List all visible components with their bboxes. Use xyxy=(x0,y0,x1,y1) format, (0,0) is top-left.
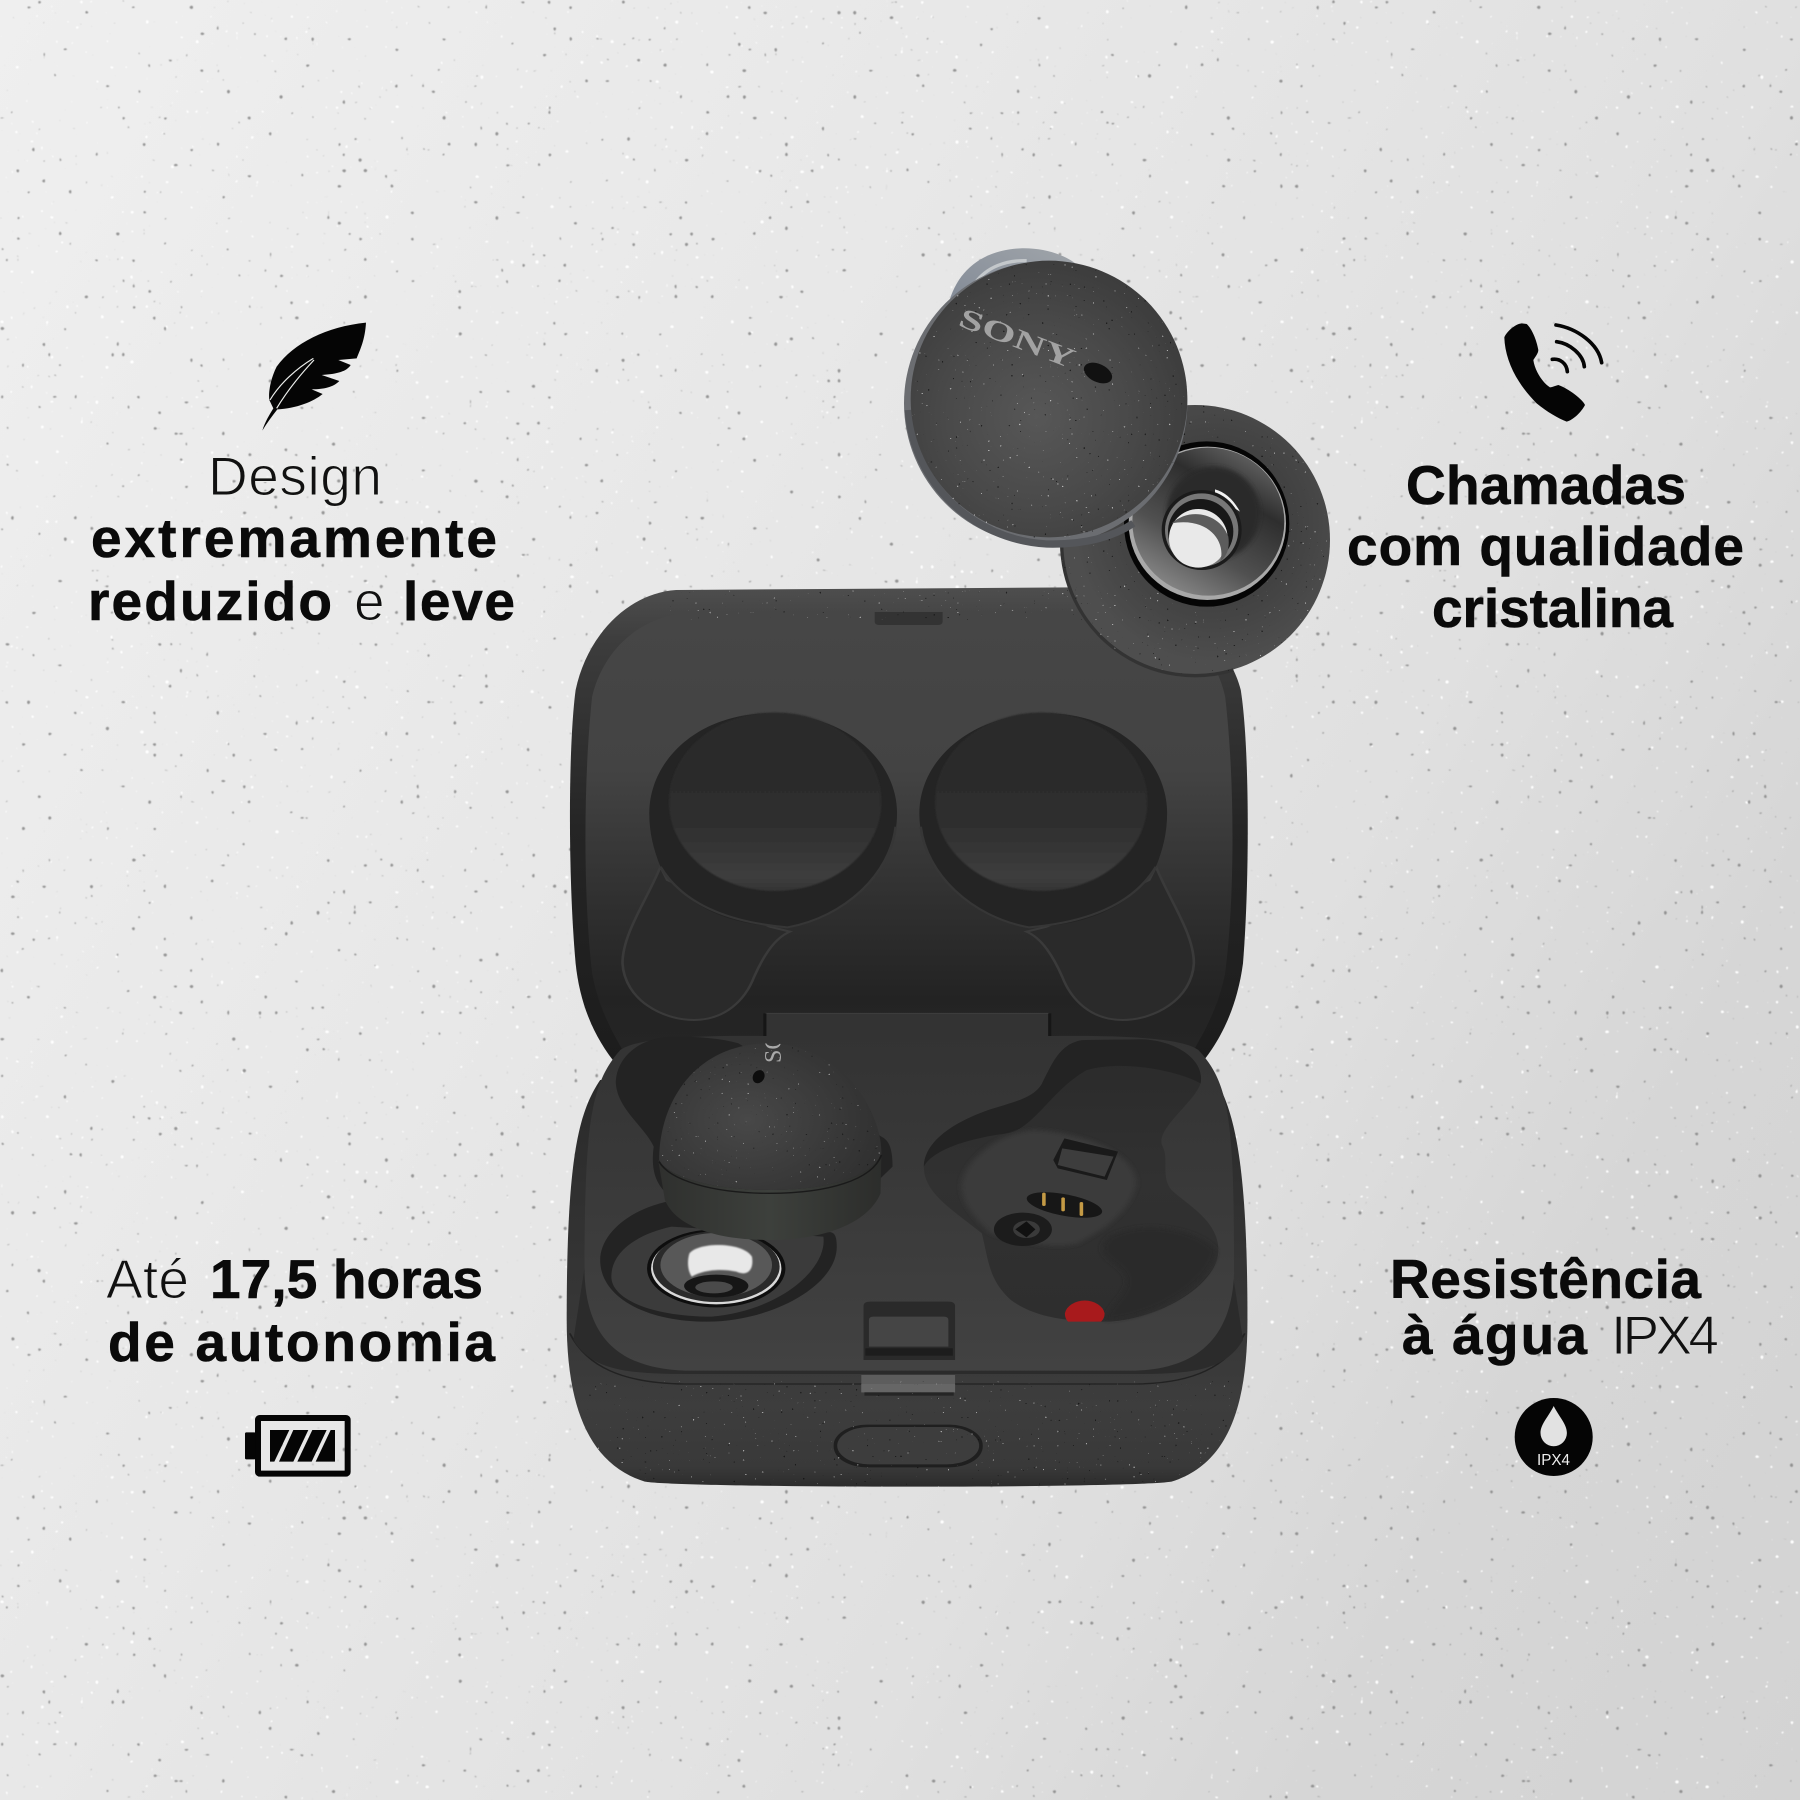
icon: phone with signal xyxy=(1504,323,1602,422)
bud speckle xyxy=(662,1046,880,1186)
lid cup left xyxy=(622,712,897,1020)
earbud in tray: slot xyxy=(751,1069,766,1084)
lid hinge xyxy=(765,1013,1050,1060)
dome speckle xyxy=(912,264,1187,538)
text: design xyxy=(88,445,515,632)
text: design: reduzido xyxy=(88,570,332,632)
metal ear loop xyxy=(1124,441,1289,607)
disc speckle xyxy=(1060,405,1330,675)
earbud in tray: SONY logo: SON xyxy=(761,1015,787,1063)
right well xyxy=(924,1039,1218,1322)
gold pins xyxy=(1023,1187,1106,1223)
icon: battery xyxy=(245,1418,348,1474)
icon: water drop badge xyxy=(1515,1398,1593,1476)
SONY logo and mic slot: SONY xyxy=(954,303,1079,375)
earbud in tray: stem disc xyxy=(611,1227,824,1317)
SONY logo and mic slot xyxy=(954,303,1115,387)
text: autonomy: Até xyxy=(106,1248,189,1310)
earbud in tray: band xyxy=(658,1153,881,1240)
text: IPX4 resistance xyxy=(1390,1248,1719,1366)
dome xyxy=(911,261,1187,537)
text: IPX4 resistance: à água xyxy=(1402,1304,1587,1366)
text: autonomy: de autonomia xyxy=(108,1311,495,1373)
base rim xyxy=(904,262,1187,545)
product: charging case and earbuds xyxy=(560,248,1330,1660)
red marker xyxy=(1065,1301,1105,1322)
silicone ring xyxy=(948,248,1078,320)
text: IPX4 resistance: Resistência xyxy=(1390,1248,1701,1310)
text: design: leve xyxy=(403,570,515,632)
feature: ultra-small and light design xyxy=(88,323,515,632)
loose earbud: main body xyxy=(904,248,1187,545)
feature: crystal-clear calls xyxy=(1347,323,1744,639)
text: design: e xyxy=(354,570,385,632)
lid cup right xyxy=(919,712,1194,1020)
tray xyxy=(585,1036,1234,1371)
charging tab xyxy=(1053,1138,1118,1180)
feature: battery life xyxy=(106,1248,495,1474)
text: design: Design xyxy=(208,445,382,507)
text: calls xyxy=(1347,454,1744,639)
text: calls: Chamadas xyxy=(1406,454,1686,516)
case speckle xyxy=(586,1381,1235,1487)
text: autonomy xyxy=(106,1248,495,1373)
left well xyxy=(600,1037,893,1322)
loose earbud: rear disc with ear loop xyxy=(1060,405,1330,676)
text: autonomy: 17,5 horas xyxy=(210,1248,483,1310)
magnet xyxy=(994,1213,1052,1246)
earbud in tray: dome xyxy=(659,1043,881,1190)
text: design: extremamente xyxy=(91,507,497,569)
case body xyxy=(567,1080,1247,1487)
text: IPX4 resistance: IPX4 xyxy=(1611,1304,1719,1366)
lid speckle xyxy=(670,590,1130,620)
case lid xyxy=(570,587,1248,1067)
lid notch xyxy=(875,612,943,625)
case button xyxy=(834,1425,983,1467)
front hinge xyxy=(861,1375,955,1396)
feature: water resistance xyxy=(1390,1248,1719,1476)
text: calls: cristalina xyxy=(1432,577,1673,639)
case base and tray xyxy=(567,1036,1247,1487)
tray clasp xyxy=(864,1302,955,1360)
icon: water drop badge: IPX4 xyxy=(1537,1452,1570,1469)
text: calls: com qualidade xyxy=(1347,515,1744,577)
icon: feather xyxy=(262,323,366,431)
rim line xyxy=(570,1333,1245,1384)
